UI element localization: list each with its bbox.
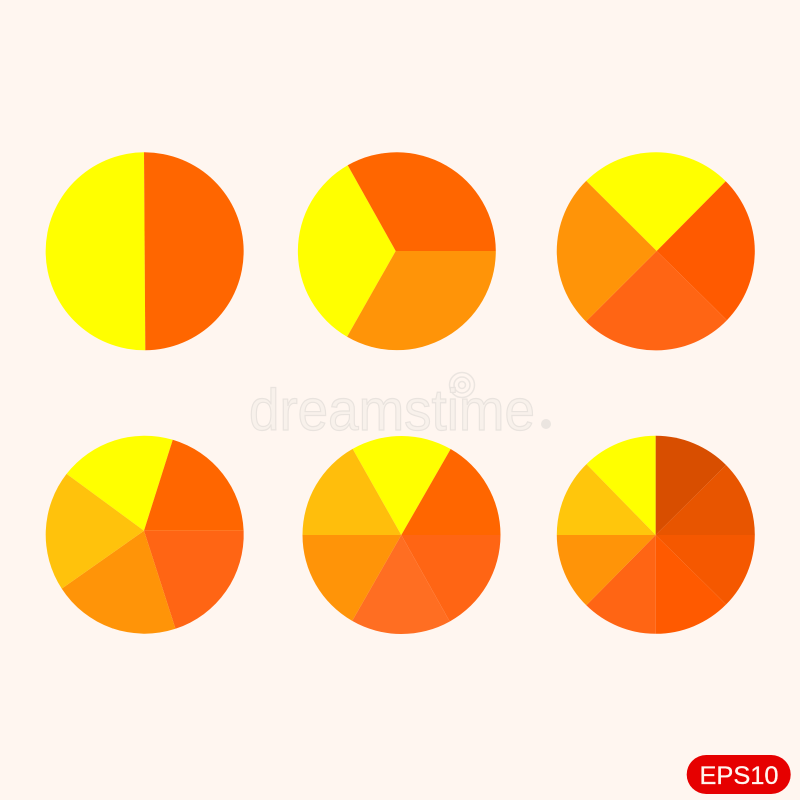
pie chart: 5 segments — [46, 436, 244, 634]
pie chart: 2 segments — [46, 152, 244, 350]
segment: deep orange — [656, 535, 726, 634]
segment: amber — [557, 535, 656, 605]
segment: yellow — [298, 165, 396, 337]
segment: red orange — [586, 535, 656, 634]
segment: yellow half — [46, 152, 145, 350]
segment: amber — [62, 531, 175, 634]
segment: red orange — [144, 531, 244, 629]
segment: amber — [557, 181, 657, 322]
segment: orange — [348, 152, 496, 251]
pie chart: 8 segments — [557, 436, 755, 634]
segment: orange half — [144, 152, 244, 350]
segment: amber — [302, 535, 401, 621]
segment: gold — [302, 449, 401, 535]
segment: orange — [586, 251, 727, 350]
badge: EPS10: EPS10 — [700, 762, 778, 790]
segment: dark orange — [656, 465, 755, 535]
segment: light red orange — [352, 535, 450, 634]
segment: yellow — [353, 436, 451, 535]
watermark: dreamstime: dreamstime — [249, 378, 535, 443]
segment: darkest orange — [656, 436, 726, 535]
badge: EPS10 — [687, 755, 791, 794]
pie chart: 6 segments — [302, 436, 500, 634]
segment: yellow — [586, 436, 656, 535]
segment: gold — [46, 474, 144, 589]
segment: deep orange — [657, 181, 755, 320]
segment: red orange — [401, 535, 500, 621]
pie chart: 3 segments — [298, 152, 496, 350]
segment: yellow — [67, 436, 173, 531]
segment: burnt orange — [656, 535, 755, 605]
segment: yellow — [586, 152, 726, 251]
segment: amber — [347, 251, 496, 350]
pie chart: 4 segments — [557, 152, 755, 350]
segment: gold — [557, 464, 656, 535]
segment: orange — [401, 449, 500, 535]
segment: orange — [144, 440, 244, 531]
